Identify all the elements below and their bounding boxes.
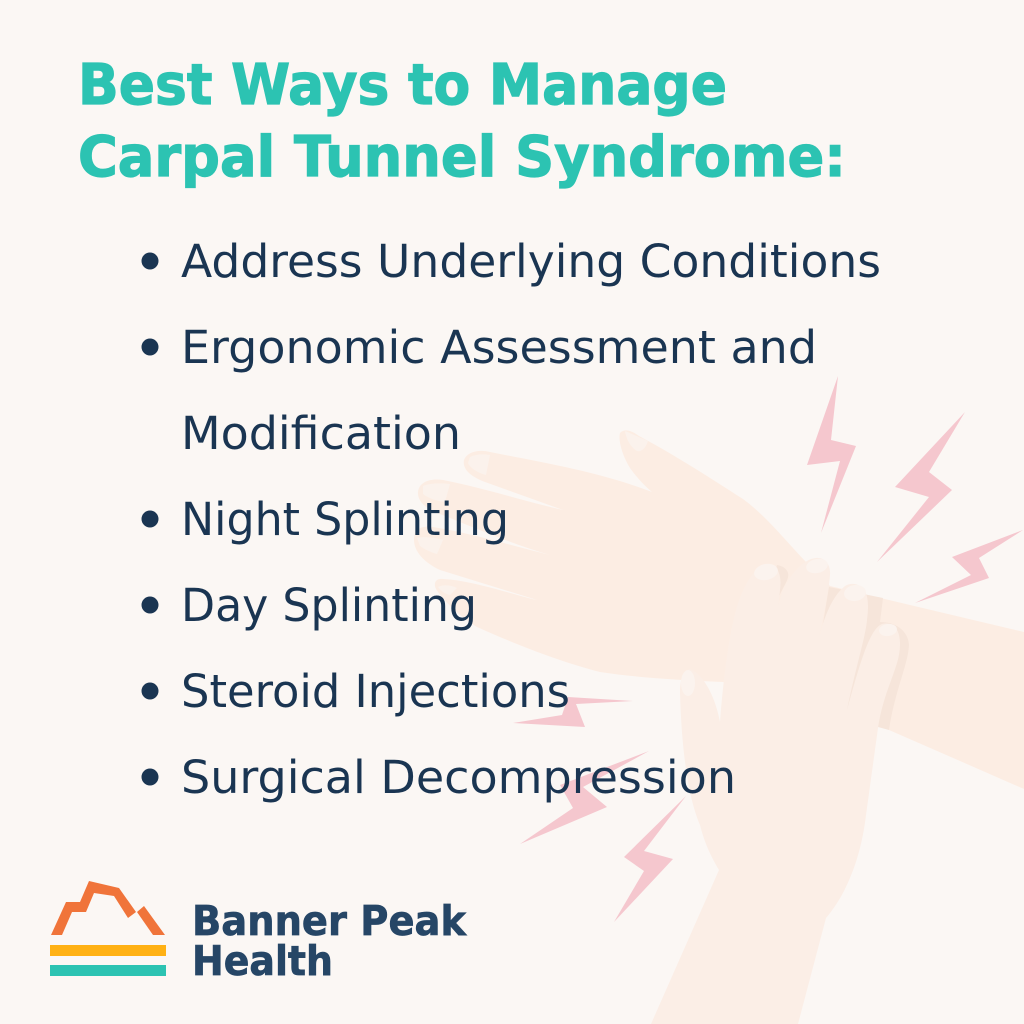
title	[78, 53, 846, 190]
icon: mountain mark	[50, 881, 166, 976]
illustration: hands with wrist pain	[414, 430, 1024, 1024]
list item: ergonomic assessment: Ergonomic Assessment and	[181, 321, 817, 374]
logo wordmark: Banner Peak	[192, 897, 468, 945]
list item: surgical decompression: Surgical Decompression	[181, 751, 736, 804]
icon: bolt lower left	[520, 751, 649, 844]
icon: lower hand and forearm	[651, 558, 900, 1024]
icon: bolt upper right	[877, 412, 965, 562]
list item: steroid injections: Steroid Injections	[181, 665, 570, 718]
icon: fingernails of upper hand	[417, 431, 648, 595]
logo wordmark: Health	[192, 937, 333, 985]
title: Carpal Tunnel Syndrome:	[78, 125, 846, 190]
icon: bolt top	[807, 376, 856, 533]
icon: upper hand and forearm	[414, 430, 1024, 789]
bullet list	[142, 235, 881, 804]
icon: fingernails of lower hand	[681, 557, 898, 696]
icon: wrist and finger shadows	[760, 565, 909, 730]
icon: bolt left	[513, 697, 633, 727]
icon: bolt bottom	[614, 796, 686, 922]
icon: bolt right	[915, 530, 1023, 603]
title: Best Ways to Manage	[78, 53, 727, 118]
list item: ergonomic assessment: Modification	[181, 407, 461, 460]
list item: address underlying conditions: Address Underlying Conditions	[181, 235, 881, 288]
logo: Banner Peak Health	[50, 881, 468, 985]
list item: day splinting: Day Splinting	[181, 579, 477, 632]
list item: ergonomic assessment	[142, 321, 817, 460]
list item: night splinting: Night Splinting	[181, 493, 509, 546]
logo wordmark	[192, 897, 468, 985]
icon: pain lightning bolts	[513, 376, 1023, 922]
